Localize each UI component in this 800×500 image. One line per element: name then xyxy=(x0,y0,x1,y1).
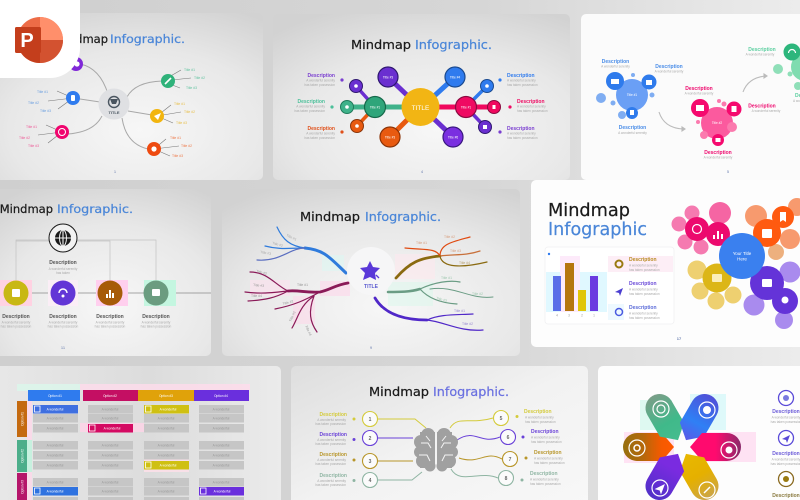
pastel highlights xyxy=(624,394,756,463)
top description xyxy=(49,260,78,275)
panel: slide 6 chart and bubbles xyxy=(531,180,800,347)
right descriptions: A wonderful serenity xyxy=(525,416,554,420)
central TITLE bubble xyxy=(402,88,440,126)
flow arrows xyxy=(659,74,767,131)
left descriptions: A wonderful serenity xyxy=(317,418,346,422)
branch labels: Title #2 xyxy=(282,299,294,306)
row headers: Option #3 xyxy=(20,480,24,494)
top description: Description xyxy=(49,260,77,266)
slide 6 heading: Infographic xyxy=(548,219,647,240)
chart legend items: A wonderful serenity xyxy=(629,264,658,268)
row headers: Option #1 xyxy=(20,412,24,426)
chart legend items: Description xyxy=(629,305,657,311)
branch labels: Title #1 xyxy=(297,283,308,287)
right descriptions: A wonderful serenity xyxy=(517,104,546,108)
page number: 5 xyxy=(727,169,730,174)
timeline descriptions: Description xyxy=(96,314,124,320)
petal icons xyxy=(629,401,737,498)
branch labels: Title #2 xyxy=(256,269,268,276)
chart legend items: has taken possession xyxy=(629,316,660,320)
cell labels: A wonderful xyxy=(47,464,64,468)
branch labels: Title #2 xyxy=(444,235,455,239)
thick connector limbs xyxy=(347,77,494,137)
branch labels: Title #2 xyxy=(272,241,284,248)
right descriptions: Description xyxy=(531,429,559,435)
branch labels: Title #1 xyxy=(454,309,465,313)
green, yellow and orange nodes xyxy=(147,74,175,156)
left descriptions: Description xyxy=(319,432,347,438)
numbered circles: 5 xyxy=(500,416,503,422)
panel: slide 3 cluster flow xyxy=(581,14,800,180)
slide 1 connector curves xyxy=(38,64,191,156)
branch labels: Title #4 xyxy=(251,294,262,298)
right-side descriptions: Description xyxy=(772,409,800,415)
badge: PowerPoint logo xyxy=(0,0,80,78)
branch labels xyxy=(251,233,483,336)
pink cluster descriptions: Description xyxy=(748,104,776,110)
chart legend items: Description xyxy=(629,257,657,263)
cell labels: A wonderful xyxy=(102,490,119,494)
numbered circles: 3 xyxy=(369,459,372,465)
bar chart: 4 xyxy=(556,314,558,318)
title bubbles: Title #1 xyxy=(461,106,471,110)
pink cluster xyxy=(691,99,742,146)
right descriptions: Description xyxy=(530,471,558,477)
green cluster: Description xyxy=(748,47,776,53)
slide 1 heading xyxy=(55,32,185,46)
right descriptions: Description xyxy=(534,450,562,456)
page number: 17 xyxy=(677,336,682,341)
checked cells xyxy=(33,405,244,496)
left descriptions: A wonderful serenity xyxy=(317,479,346,483)
branch labels: Title #3 xyxy=(288,311,297,322)
column headers: Option #4 xyxy=(214,394,228,398)
column headers xyxy=(28,390,249,401)
title bubbles: Title #1 xyxy=(370,106,380,110)
numbered circles: 7 xyxy=(509,457,512,463)
left descriptions: has taken possession xyxy=(315,483,346,487)
left descriptions: has taken possession xyxy=(315,422,346,426)
left descriptions: Description xyxy=(297,99,325,105)
numbered circles: 8 xyxy=(505,476,508,482)
left descriptions xyxy=(294,73,344,140)
branch labels: Title #3 xyxy=(450,249,461,253)
branch labels: Title #4 xyxy=(304,325,312,336)
cell labels: A wonderful xyxy=(47,426,64,430)
left descriptions: A wonderful serenity xyxy=(317,438,346,442)
branch labels: Title #2 xyxy=(28,101,39,105)
flower petals xyxy=(623,389,741,500)
slide 8 heading: Infographic. xyxy=(433,385,509,399)
slide 5 heading: Infographic. xyxy=(365,210,441,224)
timeline descriptions: A wonderful serenity xyxy=(142,320,171,324)
icon: PowerPoint disc xyxy=(17,17,63,63)
green branch xyxy=(388,281,493,304)
right descriptions: has taken possession xyxy=(517,109,548,113)
branch labels: Title #2 xyxy=(184,110,195,114)
slide 8 heading: Mindmap xyxy=(369,385,429,399)
branch labels: Title #1 xyxy=(286,233,297,242)
right-side descriptions: A wonderful serenity xyxy=(772,458,800,462)
pink cluster descriptions: A wonderful serenity xyxy=(685,92,714,96)
timeline nodes xyxy=(0,280,176,306)
branch labels: Title #1 xyxy=(37,90,48,94)
left descriptions: Description xyxy=(319,452,347,458)
panel: slide 7 options matrix xyxy=(0,366,281,500)
right descriptions: has taken possession xyxy=(507,136,538,140)
timeline descriptions: A wonderful serenity xyxy=(96,320,125,324)
branch labels: Title #2 xyxy=(462,322,473,326)
title bubbles xyxy=(364,67,476,147)
right-side descriptions: A wonderful serenity xyxy=(772,416,800,420)
bar chart xyxy=(546,253,607,318)
left descriptions: A wonderful serenity xyxy=(306,132,335,136)
purple branch xyxy=(375,298,483,330)
central star title xyxy=(347,247,395,295)
connector lines xyxy=(378,418,502,480)
timeline descriptions: A wonderful serenity xyxy=(2,320,31,324)
green cluster: A wonderful serenity xyxy=(746,52,775,56)
branch labels: Title #3 xyxy=(176,121,187,125)
chart legend items: A wonderful serenity xyxy=(629,288,658,292)
numbered circles: 1 xyxy=(369,417,372,423)
branch labels: Title #1 xyxy=(416,241,427,245)
branch labels xyxy=(19,68,205,158)
right descriptions: Description xyxy=(517,99,545,105)
cell labels: A wonderful xyxy=(213,464,230,468)
blue cluster descriptions: A wonderful serenity xyxy=(655,70,684,74)
timeline descriptions: A wonderful serenity xyxy=(49,320,78,324)
pink cluster descriptions xyxy=(685,86,781,160)
blue cluster descriptions: Description xyxy=(655,64,683,70)
blue cluster xyxy=(596,72,656,119)
page number: 9 xyxy=(370,345,373,350)
row headers: Option #2 xyxy=(20,449,24,463)
cell labels: A wonderful xyxy=(47,480,64,484)
cell labels: A wonderful xyxy=(158,444,175,448)
blue cluster descriptions: Description xyxy=(619,125,646,131)
branch labels: Title #1 xyxy=(174,102,185,106)
column headers: Option #1 xyxy=(48,394,62,398)
branch labels: Title #3 xyxy=(260,250,271,256)
right descriptions: A wonderful serenity xyxy=(531,436,560,440)
timeline descriptions: Description xyxy=(142,314,170,320)
panel: slide 8 brain mindmap xyxy=(291,366,588,500)
panel: slide 5 organic branches mindmap xyxy=(222,189,520,356)
slide 8 heading xyxy=(369,385,509,399)
branch labels: Title #3 xyxy=(253,283,264,288)
panel: slide 9 flower diagram xyxy=(598,366,800,500)
cell labels: A wonderful xyxy=(158,454,175,458)
checked cells: A wonderful xyxy=(214,490,231,494)
slide 6 heading: Mindmap xyxy=(548,200,630,221)
chart legend items: has taken possession xyxy=(629,292,660,296)
right descriptions: A wonderful serenity xyxy=(507,132,536,136)
globe icon xyxy=(49,224,77,252)
cell labels: A wonderful xyxy=(158,490,175,494)
slide 2 heading xyxy=(351,38,492,52)
cell labels: A wonderful xyxy=(102,416,119,420)
left descriptions: A wonderful serenity xyxy=(296,104,325,108)
green cluster xyxy=(746,44,800,103)
left descriptions: Description xyxy=(307,126,335,132)
right-side descriptions: Description xyxy=(772,493,800,499)
branch labels: Title #1 xyxy=(441,276,452,280)
blue cluster: Title #1 xyxy=(627,93,637,97)
left descriptions: Description xyxy=(307,73,335,79)
column headers: Option #2 xyxy=(103,394,117,398)
timeline descriptions: has taken possession xyxy=(48,324,79,328)
cell labels xyxy=(47,408,230,494)
slide 2 heading: Infographic. xyxy=(415,38,492,52)
cell labels: A wonderful xyxy=(213,454,230,458)
numbered circles: 6 xyxy=(507,435,510,441)
bar chart: 1 xyxy=(593,314,595,318)
cell labels: A wonderful xyxy=(47,444,64,448)
cell labels: A wonderful xyxy=(158,426,175,430)
top description: has taken xyxy=(56,271,70,275)
title bubbles: Title #3 xyxy=(383,76,393,80)
timeline descriptions: Description xyxy=(49,314,77,320)
right descriptions: has taken possession xyxy=(507,83,538,87)
branch labels: Title #3 xyxy=(436,296,448,303)
slide 5 heading xyxy=(300,210,441,224)
branch labels: Title #1 xyxy=(170,136,181,140)
page number: 1 xyxy=(114,169,117,174)
blue cluster descriptions: A wonderful serenity xyxy=(618,131,647,135)
central title node: TITLE xyxy=(108,110,120,115)
right-side descriptions: Description xyxy=(772,451,800,457)
cell labels: A wonderful xyxy=(102,408,119,412)
branch labels: Title #1 xyxy=(26,125,37,129)
slide 5 heading: Mindmap xyxy=(300,210,360,224)
orange-olive branch xyxy=(396,237,487,278)
icon satellites xyxy=(340,80,500,134)
slide 6 heading xyxy=(548,200,647,240)
branch labels: Title #3 xyxy=(40,109,51,113)
right descriptions xyxy=(498,73,548,140)
cell labels: A wonderful xyxy=(213,416,230,420)
left descriptions: Description xyxy=(319,412,347,418)
left descriptions: has taken possession xyxy=(304,83,335,87)
timeline descriptions: has taken possession xyxy=(95,324,126,328)
timeline descriptions: Description xyxy=(2,314,30,320)
slide 2 heading: Mindmap xyxy=(351,38,411,52)
orange bubbles xyxy=(745,198,800,260)
pink cluster: Title #2 xyxy=(712,121,722,125)
branch labels: Title #3 xyxy=(28,144,39,148)
slide 1 heading: Mindmap xyxy=(55,32,108,46)
checked cells: A wonderful xyxy=(47,408,64,412)
numbered circles xyxy=(362,410,518,488)
connector frame and timeline xyxy=(0,240,211,293)
central title node xyxy=(98,88,130,120)
left descriptions: has taken possession xyxy=(304,136,335,140)
branch labels: Title #3 xyxy=(172,154,183,158)
chart legend items: Description xyxy=(629,281,657,287)
checked cells: A wonderful xyxy=(47,490,64,494)
right descriptions: Description xyxy=(507,126,535,132)
column headers: Option #3 xyxy=(159,394,173,398)
cell labels: A wonderful xyxy=(102,444,119,448)
cell labels: A wonderful xyxy=(47,454,64,458)
chart legend items: has taken possession xyxy=(629,268,660,272)
branch labels: Title #3 xyxy=(186,86,197,90)
chart card xyxy=(545,247,674,324)
branch labels: Title #2 xyxy=(472,292,483,296)
chart legend items xyxy=(608,256,673,320)
title bubbles: Title #6 xyxy=(448,136,458,140)
title bubbles: Title #4 xyxy=(450,76,460,80)
cell labels: A wonderful xyxy=(213,408,230,412)
branch labels: Title #2 xyxy=(181,144,192,148)
chart legend items: A wonderful serenity xyxy=(629,312,658,316)
checked cells: A wonderful xyxy=(160,408,177,412)
cell labels: A wonderful xyxy=(158,480,175,484)
blue cluster descriptions xyxy=(601,59,684,135)
slide 1 heading: Infographic. xyxy=(110,32,185,46)
central bubble: Your Title xyxy=(733,251,752,256)
cell labels: A wonderful xyxy=(102,480,119,484)
pink cluster descriptions: A wonderful serenity xyxy=(752,109,781,113)
matrix cells xyxy=(33,405,244,500)
top description: A wonderful serenity xyxy=(49,267,78,271)
slide 4 heading: Infographic. xyxy=(57,202,133,216)
left descriptions: A wonderful serenity xyxy=(317,458,346,462)
pink cluster descriptions: A wonderful serenity xyxy=(704,156,733,160)
right descriptions: has taken possession xyxy=(531,440,562,444)
right descriptions: has taken possession xyxy=(530,482,561,486)
pink bubbles xyxy=(672,202,731,254)
pastel highlights xyxy=(17,384,250,500)
slide 4 heading xyxy=(0,202,133,216)
right descriptions: has taken possession xyxy=(525,420,556,424)
maroon branch xyxy=(245,272,348,332)
yellow bubbles xyxy=(688,260,742,310)
blue cluster descriptions: Description xyxy=(602,59,629,65)
cell labels: A wonderful xyxy=(102,454,119,458)
right descriptions: has taken possession xyxy=(534,461,565,465)
pink cluster descriptions: Description xyxy=(685,86,713,92)
blue branch xyxy=(257,227,346,273)
branch labels: Title #1 xyxy=(184,68,195,72)
blue cluster descriptions: A wonderful serenity xyxy=(601,64,630,68)
slide 4 heading: Mindmap xyxy=(0,202,53,216)
left descriptions xyxy=(315,412,356,487)
checked cells: A wonderful xyxy=(104,426,121,430)
central TITLE bubble: TITLE xyxy=(412,105,430,112)
page number: 4 xyxy=(421,169,424,174)
purple bubbles xyxy=(744,262,800,329)
cell labels: A wonderful xyxy=(47,416,64,420)
panel: slide 4 horizontal timeline xyxy=(0,189,211,356)
pastel branch highlights xyxy=(250,254,435,324)
panel: slide 1 radial mindmap xyxy=(0,13,263,180)
left descriptions: A wonderful serenity xyxy=(306,78,335,82)
timeline descriptions xyxy=(1,314,172,328)
right descriptions: A wonderful serenity xyxy=(507,78,536,82)
bar chart: 2 xyxy=(581,314,583,318)
page number: 11 xyxy=(61,345,66,350)
timeline descriptions: has taken possession xyxy=(1,324,32,328)
panel: slide 2 bubble mindmap xyxy=(273,14,570,180)
numbered circles: 2 xyxy=(369,436,372,442)
right descriptions: A wonderful serenity xyxy=(530,478,559,482)
cell labels: A wonderful xyxy=(213,444,230,448)
pink cluster descriptions: Description xyxy=(704,150,732,156)
right-side descriptions xyxy=(771,390,800,499)
title bubbles: Title #3 xyxy=(385,136,395,140)
purple, blue and pink nodes xyxy=(55,57,83,139)
left descriptions: has taken possession xyxy=(294,109,325,113)
left descriptions: has taken possession xyxy=(315,442,346,446)
right descriptions: Description xyxy=(507,73,535,79)
central bubble: Here xyxy=(737,256,747,262)
cell labels: A wonderful xyxy=(213,480,230,484)
right descriptions: Description xyxy=(524,409,552,415)
numbered circles: 4 xyxy=(369,478,372,484)
right descriptions: A wonderful serenity xyxy=(534,456,563,460)
branch labels: Title #2 xyxy=(194,76,205,80)
branch labels: Title #2 xyxy=(19,136,30,140)
left descriptions: Description xyxy=(319,473,347,479)
branch labels: Title #4 xyxy=(459,261,470,265)
left descriptions: has taken possession xyxy=(315,462,346,466)
cell labels: A wonderful xyxy=(102,464,119,468)
right descriptions xyxy=(516,409,565,486)
icon: P tile: P xyxy=(20,30,34,52)
icon: brain xyxy=(414,428,458,472)
checked cells: A wonderful xyxy=(160,464,177,468)
central bubble xyxy=(719,233,765,279)
timeline descriptions: has taken possession xyxy=(141,324,172,328)
row headers xyxy=(17,401,27,500)
cell labels: A wonderful xyxy=(158,416,175,420)
bar chart: 3 xyxy=(568,314,570,318)
cell labels: A wonderful xyxy=(213,426,230,430)
central star title: TITLE xyxy=(364,284,379,290)
